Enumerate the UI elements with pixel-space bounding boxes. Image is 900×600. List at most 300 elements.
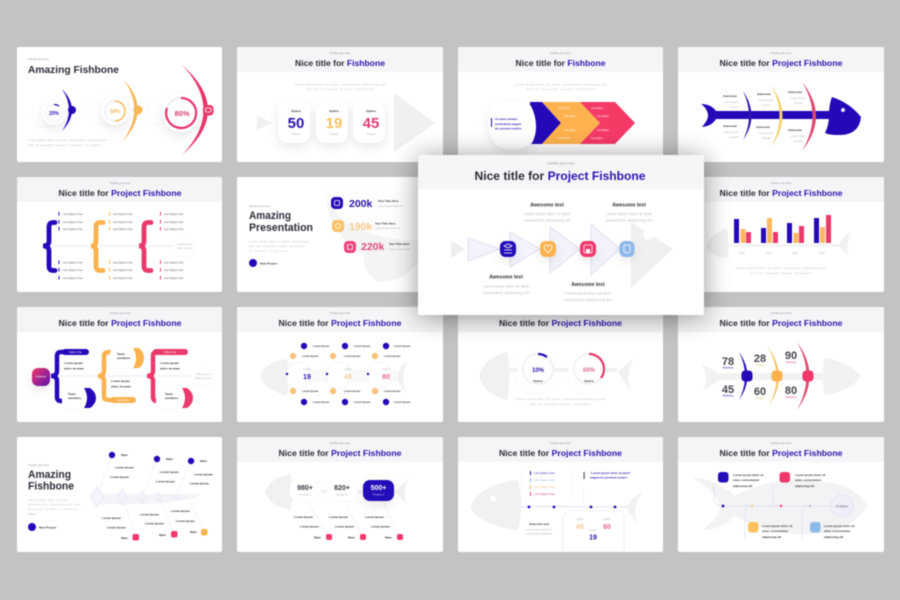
icon: yellow: [772, 370, 782, 382]
icon: light blue: [620, 241, 634, 257]
value: 28: Product: [756, 364, 764, 367]
labels: Awesome: [756, 125, 770, 129]
head triangle: [394, 93, 435, 152]
brace: yellow: [91, 222, 103, 270]
body text: Lorem ipsum dolor sit amet, consectetur adipiscing elit: [28, 138, 107, 142]
rows: top icons: Lorem Ipsum: [394, 344, 411, 348]
body text: Sed do eiusmod tempor incididunt: [249, 244, 305, 248]
title: [28, 469, 74, 492]
slide: Project Fishbone timeline grid: [237, 307, 443, 422]
labels: Awesome: [757, 92, 771, 96]
card: 980+: [290, 480, 321, 501]
card: 45: Option: [366, 109, 376, 113]
title: Nice title for Project Fishbone: [278, 318, 402, 328]
problem circle: Problem: [836, 504, 848, 508]
labels: Lorem Ipsum: [294, 515, 313, 519]
button: [28, 523, 56, 531]
title: Nice title for Project Fishbone: [58, 188, 182, 198]
rows: bottom icons: Lorem Ipsum: [302, 389, 319, 393]
rows: top icons: Lorem Ipsum: [344, 354, 361, 358]
option card: 60 percent: [568, 350, 606, 392]
subtitle: Subtitle goes here: [330, 441, 351, 445]
option card: 60 percent: Option: [584, 379, 594, 383]
pill: blue: [62, 349, 89, 355]
labels: Main: [385, 536, 392, 540]
spine: [519, 506, 629, 508]
subtitle: Subtitle goes here: [330, 51, 351, 55]
value: 19: [589, 528, 597, 542]
grey fish: [706, 228, 851, 258]
value: 45: Option: [576, 517, 584, 521]
top nodes: Main: [166, 457, 173, 461]
text: awesome bottom centre: consectetur adipiscing elit: [564, 298, 612, 302]
title: Nice title for Fishbone: [295, 58, 385, 68]
list: blue column: [58, 212, 83, 280]
arrow labels: List Option: [597, 115, 610, 118]
text: awesome bottom left: consectetur adipiscing elit: [482, 291, 530, 295]
values frame: [563, 511, 624, 552]
stat: 190k: [332, 220, 400, 233]
pill: yellow: Option One: [117, 399, 130, 402]
card: 980+: 980+: [297, 485, 313, 492]
arrow labels: List Option: [597, 129, 610, 132]
card: 50: 50: [288, 115, 304, 132]
labels: sit amet: [761, 136, 771, 140]
spine: [45, 245, 175, 247]
rows: bottom icons: Lorem Ipsum: [344, 389, 361, 393]
arc: pink: [182, 65, 208, 155]
card: 820+: 820+: [334, 485, 350, 492]
body text: Lorem ipsum dolor sit amet, consectetur: [249, 240, 309, 244]
ring: 80 percent: [162, 94, 200, 132]
subtitle: Subtitle goes here: [771, 51, 792, 55]
card: 50: Phases: [292, 132, 301, 136]
text blocks: members: [165, 396, 179, 400]
grey fish: [260, 359, 408, 395]
pill: yellow: [110, 397, 136, 403]
awesome text: Awesome text: [529, 522, 549, 526]
card: 500+: [363, 480, 394, 501]
text: awesome bottom centre: [564, 282, 612, 302]
text: awesome bottom left: Lorem ipsum dolor sit amet: [483, 284, 529, 288]
list: blue column: List Option One: [63, 227, 83, 231]
brace: blue: [51, 352, 70, 401]
white circle callout: [488, 101, 536, 149]
bar chart: 2021: [739, 251, 745, 255]
bottom nodes: [102, 509, 208, 540]
value: 45: 45: [722, 384, 734, 396]
value: 19: Option: [589, 528, 597, 532]
list card: List Option One: [534, 471, 555, 475]
text: awesome top left: Awesome text: [530, 202, 564, 208]
labels: Lorem ipsum: [724, 100, 738, 104]
quote: [577, 464, 635, 505]
grey fish: [265, 474, 409, 510]
list: yellow column: List Option One: [113, 220, 133, 224]
end note: Lorem ipsum: [178, 242, 192, 246]
value: 19: [303, 367, 311, 381]
subtitle: Subtitle goes here: [28, 57, 49, 61]
end note: [192, 367, 212, 385]
option card: 10 percent: Option: [533, 379, 543, 383]
value: 80: 80: [382, 374, 390, 381]
value: 28: 28: [754, 353, 766, 365]
labels: Lorem ipsum: [790, 134, 806, 138]
value: 45: 45: [344, 374, 352, 381]
title: Nice title for Project Fishbone: [278, 448, 402, 458]
arrow labels: [558, 107, 610, 140]
title: Nice title for Project Fishbone: [720, 448, 843, 458]
value: 19: 19: [589, 534, 597, 542]
text blocks: Team: [117, 352, 125, 356]
bottom nodes: Lorem Ipsum: [145, 522, 164, 526]
arc: yellow: [771, 85, 782, 147]
value: 45: [344, 367, 352, 381]
title: Nice title for Project Fishbone: [58, 318, 182, 328]
subtitle: Subtitle goes here: [110, 311, 131, 315]
arc: yellow: [122, 79, 138, 142]
end note: dolor sit amet: [195, 376, 211, 380]
text blocks: Team: [68, 392, 76, 396]
top nodes: Lorem Ipsum: [190, 482, 209, 486]
option card: 10 percent: [517, 350, 554, 392]
value: 90: Marketing: [786, 361, 797, 364]
subtitle: Subtitle goes here: [28, 463, 49, 467]
list: pink column: List Option One: [164, 260, 184, 264]
arrow: yellow: [542, 102, 600, 144]
labels: Lorem Ipsum: [335, 524, 354, 528]
text blocks: adipiscing elit: [795, 484, 814, 488]
top nodes: Lorem Ipsum: [156, 480, 175, 484]
list: blue column: List Option One: [63, 260, 83, 264]
card: 19: [316, 102, 348, 143]
icon: blue: [718, 472, 728, 482]
grey triangle: head: [631, 222, 673, 288]
value: 90: 90: [785, 350, 797, 362]
rows: top icons: Lorem Ipsum: [302, 354, 319, 358]
stat: 200k: Text Title Here: [378, 199, 399, 203]
ring: 50 percent: [101, 97, 129, 125]
value: 80: [382, 367, 390, 381]
value: 78: Marketing: [723, 366, 734, 370]
labels: Awesome: [788, 90, 802, 94]
bar chart: 2024: [819, 251, 825, 255]
icon: yellow: [748, 522, 758, 532]
labels: sit amet: [729, 105, 739, 109]
shadow of featured slide: [418, 157, 704, 317]
white circle callout: Ut enim veniam: [495, 117, 518, 121]
end note: dolor sit amet: [177, 246, 193, 250]
icon: yellow: [540, 241, 556, 257]
title: Nice title for Project Fishbone: [720, 318, 843, 328]
icon: blue: [500, 241, 516, 257]
body text: Lorem ipsum dolor sit amet, consectetur adipiscing elit: [514, 82, 607, 86]
text blocks: amet, consectetuer: [733, 478, 760, 482]
body text: Lorem ipsum dolor sit amet, consectetur adipiscing elit: [294, 82, 386, 86]
spine: [723, 505, 830, 507]
spine dots: [286, 373, 369, 375]
fish eye: [490, 496, 496, 502]
white circle callout: do psiruisti molins: [495, 126, 522, 130]
labels: [723, 90, 806, 143]
body text: [516, 397, 606, 406]
labels: Lorem Ipsum: [371, 524, 390, 528]
title: Nice title for Fishbone: [516, 58, 606, 68]
labels: sit amet: [793, 139, 803, 143]
icon: pink node: [203, 105, 214, 116]
rows: bottom icons: Lorem Ipsum: [354, 400, 371, 404]
button: New Project: [39, 526, 56, 530]
value: 60: 60: [754, 386, 766, 398]
rows: top icons: Lorem Ipsum: [384, 354, 401, 358]
arc: blue: [743, 91, 752, 140]
bottom nodes: Main: [121, 536, 128, 540]
grey fish: [702, 358, 861, 395]
list: pink column: List Option One: [164, 220, 184, 224]
text blocks: dolor sit amet: [111, 384, 131, 388]
brace: pink: [139, 222, 151, 270]
slide: Project Fishbone labelled braces: [17, 307, 222, 422]
title: Nice title for Project Fishbone: [499, 318, 622, 328]
body text: Magna: [28, 512, 36, 516]
slide: Project Fishbone number arcs: [678, 307, 884, 422]
slide: Project Fishbone solid fish: [678, 47, 884, 162]
subtitle: Subtitle goes here: [110, 181, 131, 185]
stat: 200k: [331, 197, 403, 210]
featured slide: Project Fishbone arrows: [418, 155, 704, 315]
card: 45: [353, 102, 385, 143]
top nodes: Lorem Ipsum: [115, 466, 134, 470]
spine dots: [722, 505, 811, 507]
title: Nice title for Project Fishbone: [720, 58, 843, 68]
text blocks: Lorem ipsum dolor sit: [795, 473, 825, 477]
body text: Lorem ipsum dolor sit amet: [28, 498, 68, 502]
source block: Fishbone: [36, 374, 47, 378]
problem circle: [831, 495, 853, 517]
list: yellow column: List Option One: [113, 260, 133, 264]
title: Fishbone: [28, 480, 74, 492]
white panel: [325, 190, 425, 240]
card: 820+: Product B: [336, 492, 348, 496]
card: 19: 19: [326, 115, 342, 132]
bottom nodes: Lorem Ipsum: [102, 516, 121, 520]
rows: top icons: Lorem Ipsum: [354, 344, 371, 348]
list card: [522, 462, 572, 505]
list card: List Option One: [534, 485, 555, 489]
text blocks: members: [68, 396, 82, 400]
labels: Lorem Ipsum: [300, 524, 319, 528]
value: 60: Product: [756, 397, 764, 400]
text blocks: Lorem ipsum dolor sit: [824, 524, 854, 528]
rounded brackets: [287, 362, 390, 388]
title: Nice title for Project Fishbone: [474, 169, 646, 183]
text blocks: dolor sit amet: [160, 366, 180, 370]
subtitle: Subtitle goes here: [550, 441, 572, 445]
icon: yellow node: [134, 106, 142, 114]
text blocks: Team: [165, 392, 173, 396]
arrow labels: List Option: [558, 137, 571, 140]
subtitle: Subtitle goes here: [547, 162, 575, 166]
button: New Project: [260, 262, 277, 266]
rows: bottom icons: Lorem Ipsum: [394, 400, 411, 404]
title: [249, 210, 313, 234]
bottom nodes: Lorem Ipsum: [107, 526, 126, 530]
text blocks: amet, consectetuer: [762, 529, 789, 533]
icon: blue node: [68, 106, 76, 114]
grey fish: [693, 478, 868, 535]
card: 50: Option: [291, 109, 301, 113]
text blocks: adipiscing elit: [824, 535, 843, 539]
body text: [736, 266, 826, 275]
card: 980+: Product A: [299, 492, 311, 496]
body text: [28, 498, 81, 516]
labels: Awesome: [723, 94, 737, 98]
card: 45: Phases: [367, 132, 376, 136]
value: 19: Option: [303, 367, 311, 371]
diamonds: [90, 487, 178, 507]
slide: Project Fishbone problem: [678, 437, 884, 552]
labels: sit amet: [729, 135, 739, 139]
arrow labels: List Option: [564, 115, 577, 118]
text blocks: [733, 473, 854, 539]
title: Amazing: [28, 469, 71, 481]
value: 80: 80: [785, 385, 797, 397]
top nodes: [109, 452, 213, 486]
stat: 190k: Text Title Here: [375, 222, 396, 226]
button: [249, 259, 277, 267]
bottom nodes: Lorem Ipsum: [140, 512, 159, 516]
title: Presentation: [249, 222, 313, 234]
value: 19: 19: [303, 374, 311, 381]
arrow labels: List Option: [564, 129, 577, 132]
awesome text: [526, 522, 552, 536]
labels: Awesome: [788, 128, 802, 132]
slide: Project Fishbone value cards: [237, 437, 443, 552]
labels: Lorem ipsum: [758, 131, 774, 135]
value: 78: 78: [722, 356, 734, 368]
slide: Amazing Fishbone progress rings: Sed do eiusmod tempor incididunt ut labore: [28, 143, 101, 147]
arc: yellow: [767, 346, 779, 405]
rows: bottom icons: Lorem Ipsum: [384, 389, 401, 393]
labels: Lorem ipsum: [758, 98, 774, 102]
text blocks: members: [117, 356, 131, 360]
stat: 220k: Text Title Here: [389, 242, 410, 246]
labels: Lorem ipsum: [724, 130, 738, 134]
text blocks: Lorem ipsum: [64, 361, 83, 365]
arrow labels: List Option: [558, 107, 571, 110]
text: awesome top right: Awesome text: [612, 202, 646, 208]
icon: pink: [802, 370, 814, 382]
ring: 20 percent: [42, 101, 66, 125]
subtitle: Subtitle goes here: [771, 311, 792, 315]
grey fish shape: [325, 190, 425, 282]
slide: Project Fishbone donut options: [458, 307, 663, 422]
subtitle: Subtitle goes here: [249, 204, 270, 208]
list: pink column: [160, 212, 184, 280]
text: awesome bottom left: Awesome text: [489, 274, 523, 280]
crescent accents: [84, 348, 193, 408]
list: yellow column: List Option One: [113, 227, 133, 231]
subtitle: Subtitle goes here: [550, 51, 572, 55]
blob cards: [33, 90, 182, 126]
ring: 20 percent: 20%: [49, 111, 60, 117]
bones: [297, 500, 400, 537]
slide: Project Fishbone braces: [17, 177, 222, 292]
icon: blue: [742, 370, 752, 382]
end note: [174, 236, 195, 256]
title: Amazing: [249, 210, 291, 222]
card: 19: Phases: [330, 132, 339, 136]
grey fish: [479, 352, 634, 400]
body text: Eiusmod tempor incididunt: [28, 507, 78, 511]
grey triangle: tail: [451, 241, 465, 258]
list: blue column: List Option One: [63, 268, 83, 272]
pink nodes: [326, 534, 403, 540]
pill: blue: Option One: [69, 351, 82, 354]
labels: Lorem Ipsum: [329, 515, 348, 519]
text blocks: Lorem ipsum dolor sit: [762, 524, 792, 528]
pill: pink: [153, 349, 188, 355]
arrow: pink: [580, 102, 635, 144]
text: awesome bottom left: [482, 274, 530, 295]
list: pink column: List Option One: [164, 212, 184, 216]
text blocks: Lorem ipsum dolor sit: [733, 473, 763, 477]
bar chart: 2023: [792, 251, 798, 255]
labels: Awesome: [723, 124, 737, 128]
rows: bottom icons: [290, 388, 411, 405]
triangles: [468, 224, 620, 275]
text blocks: adipiscing elit: [762, 535, 781, 539]
arrow: blue: [530, 102, 561, 144]
white circle callout: perferdicat magna: [495, 122, 521, 126]
option card: 10 percent: 10%: [532, 368, 545, 374]
body text: Consectetur adipiscing elit sed: [28, 502, 81, 506]
list card: List Option One: [534, 478, 555, 482]
text: awesome top right: consectetur adipiscing elit: [606, 218, 653, 222]
value: 45: 45: [576, 524, 584, 531]
slide: Project Fishbone bar chart: [678, 177, 884, 292]
stat: 220k: Lorem ipsum dolor: [389, 247, 411, 251]
ring: 80 percent: 80%: [174, 109, 190, 118]
rows: top icons: Lorem Ipsum: [313, 344, 330, 348]
end note: Lorem ipsum: [196, 372, 210, 376]
labels: [294, 515, 392, 540]
top nodes: Lorem Ipsum: [194, 472, 213, 476]
spine dots: [528, 506, 616, 508]
arrow labels: List Option: [591, 137, 604, 140]
stat: 220k: 220k: [361, 241, 385, 253]
subtitle: Subtitle goes here: [330, 311, 351, 315]
subtitle: Subtitle goes here: [771, 441, 792, 445]
icon: pink: [580, 241, 596, 257]
list: blue column: List Option One: [63, 212, 83, 216]
arc: blue: [62, 89, 72, 131]
top nodes: Main: [121, 453, 128, 457]
body text: Ut labore et dolore: [249, 249, 288, 253]
title: Nice title for Project Fishbone: [720, 188, 843, 198]
list: blue column: List Option One: [63, 220, 83, 224]
text blocks: amet, consectetuer: [795, 478, 822, 482]
ring: 50 percent: 50%: [110, 109, 121, 115]
text: awesome top left: [524, 202, 571, 222]
title: Nice title for Project Fishbone: [499, 448, 622, 458]
labels: Main: [314, 536, 321, 540]
rows: bottom icons: Lorem Ipsum: [313, 400, 330, 404]
stat: 200k: Lorem ipsum dolor sit: [378, 204, 403, 208]
bottom nodes: Lorem Ipsum: [176, 519, 195, 523]
icon: pink: [780, 472, 790, 482]
top nodes: Lorem Ipsum: [110, 475, 129, 479]
